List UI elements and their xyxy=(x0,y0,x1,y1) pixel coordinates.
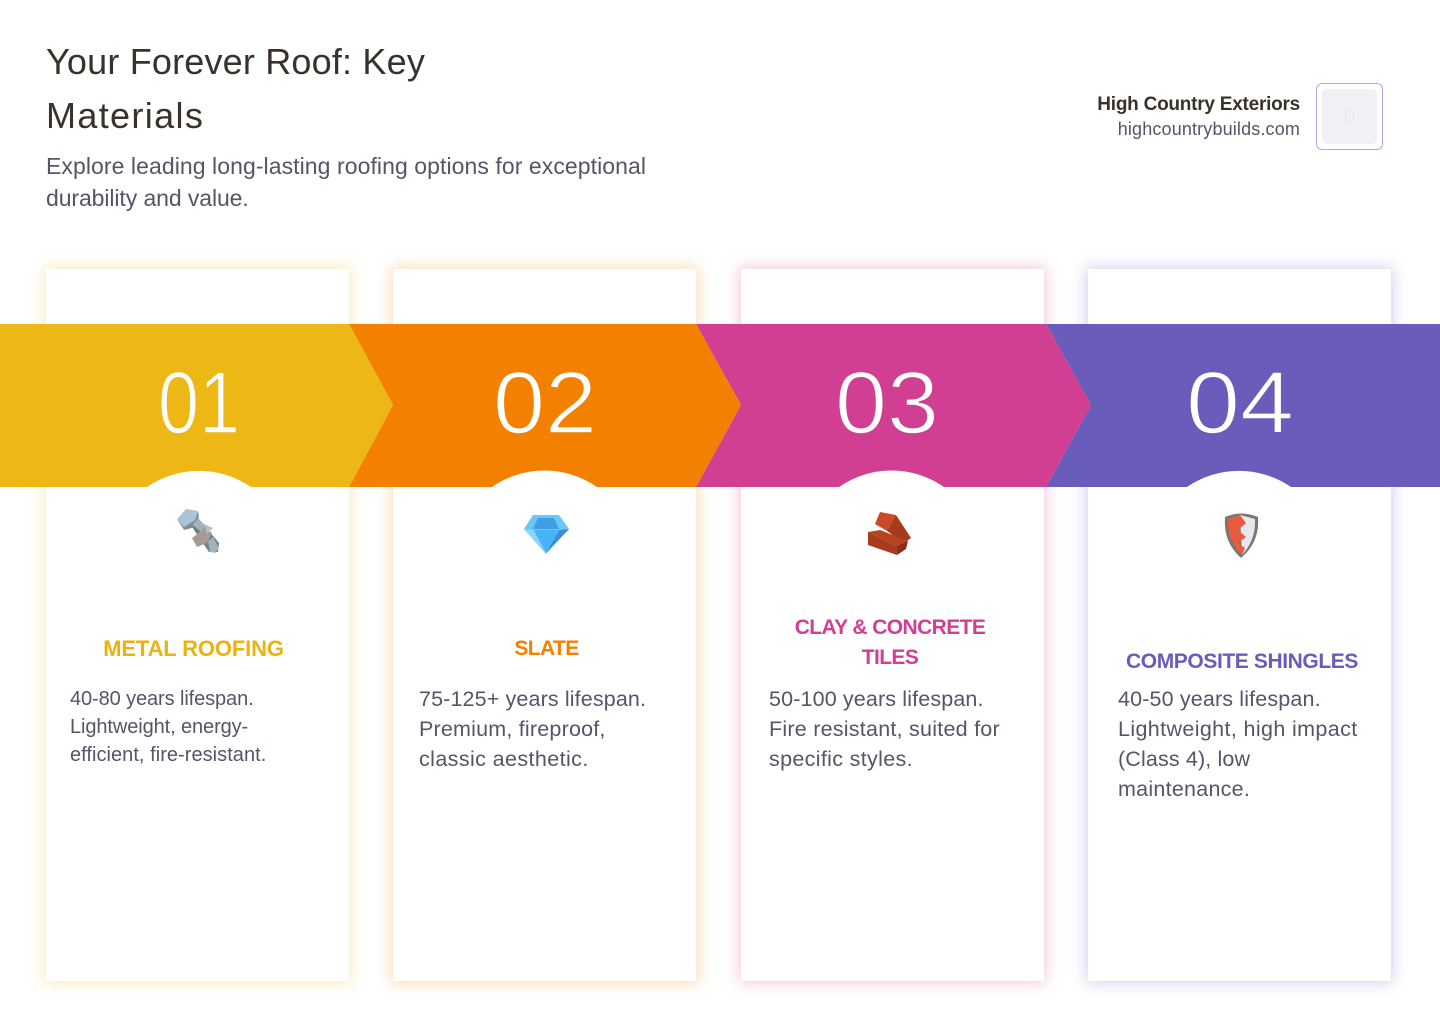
text: metal roofing description: 40-80 years lifespan. xyxy=(70,688,254,710)
text: composite shingles description: Lightweight, high impact xyxy=(1118,717,1358,741)
logo placeholder xyxy=(1316,83,1383,150)
arrow: step 03: 03 xyxy=(835,353,939,452)
panel: composite shingles card xyxy=(1088,269,1391,981)
icon: red bricks xyxy=(868,512,911,555)
text: slate description: classic aesthetic. xyxy=(419,747,589,771)
subtitle: durability and value. xyxy=(46,185,249,211)
text: clay and concrete tiles description xyxy=(769,687,1000,771)
arrow: step 01: 01 xyxy=(158,353,240,452)
arrow: step 04 xyxy=(1046,324,1440,487)
heading: metal roofing: METAL ROOFING xyxy=(103,636,284,661)
text: composite shingles description: 40-50 years lifespan. xyxy=(1118,687,1321,711)
heading: slate: SLATE xyxy=(514,637,579,660)
panel: metal roofing card xyxy=(46,269,349,981)
text: clay and concrete tiles description: Fire resistant, suited for xyxy=(769,717,1000,741)
text: slate description: Premium, fireproof, xyxy=(419,717,606,741)
arrow: step 04: 04 xyxy=(1186,353,1294,452)
arrow: step 03 xyxy=(696,324,1091,487)
arrow: step 02: 02 xyxy=(493,353,597,452)
title: Your Forever Roof: Key xyxy=(46,41,425,82)
subtitle: Explore leading long-lasting roofing options for exceptional xyxy=(46,153,646,179)
text: composite shingles description: maintenance. xyxy=(1118,777,1250,801)
text: clay and concrete tiles description: specific styles. xyxy=(769,747,913,771)
subtitle xyxy=(46,153,646,211)
brand name and website xyxy=(1097,94,1300,139)
brand name and website: High Country Exteriors xyxy=(1097,94,1300,115)
text: metal roofing description xyxy=(70,688,266,766)
arrow: step 02 xyxy=(349,324,741,487)
heading: clay and concrete tiles: CLAY & CONCRETE xyxy=(795,616,985,639)
text: composite shingles description xyxy=(1118,687,1358,801)
text: metal roofing description: Lightweight, energy- xyxy=(70,716,248,738)
panel: slate card xyxy=(393,269,696,981)
text: slate description: 75-125+ years lifespan. xyxy=(419,687,646,711)
icon: metal bolt xyxy=(177,509,219,553)
text: slate description xyxy=(419,687,646,771)
text: composite shingles description: (Class 4), low xyxy=(1118,747,1250,771)
heading: composite shingles: COMPOSITE SHINGLES xyxy=(1126,650,1358,673)
arrow: step 01 xyxy=(0,324,393,487)
heading: clay and concrete tiles xyxy=(795,616,986,669)
title: Materials xyxy=(46,95,204,136)
brand name and website: highcountrybuilds.com xyxy=(1118,119,1300,139)
panel: clay and concrete tiles card xyxy=(741,269,1044,981)
icon: blue diamond xyxy=(524,515,569,554)
text: clay and concrete tiles description: 50-100 years lifespan. xyxy=(769,687,984,711)
heading: clay and concrete tiles: TILES xyxy=(862,646,918,669)
text: metal roofing description: efficient, fire-resistant. xyxy=(70,744,266,766)
icon: shield xyxy=(1225,514,1258,558)
title xyxy=(46,41,425,136)
